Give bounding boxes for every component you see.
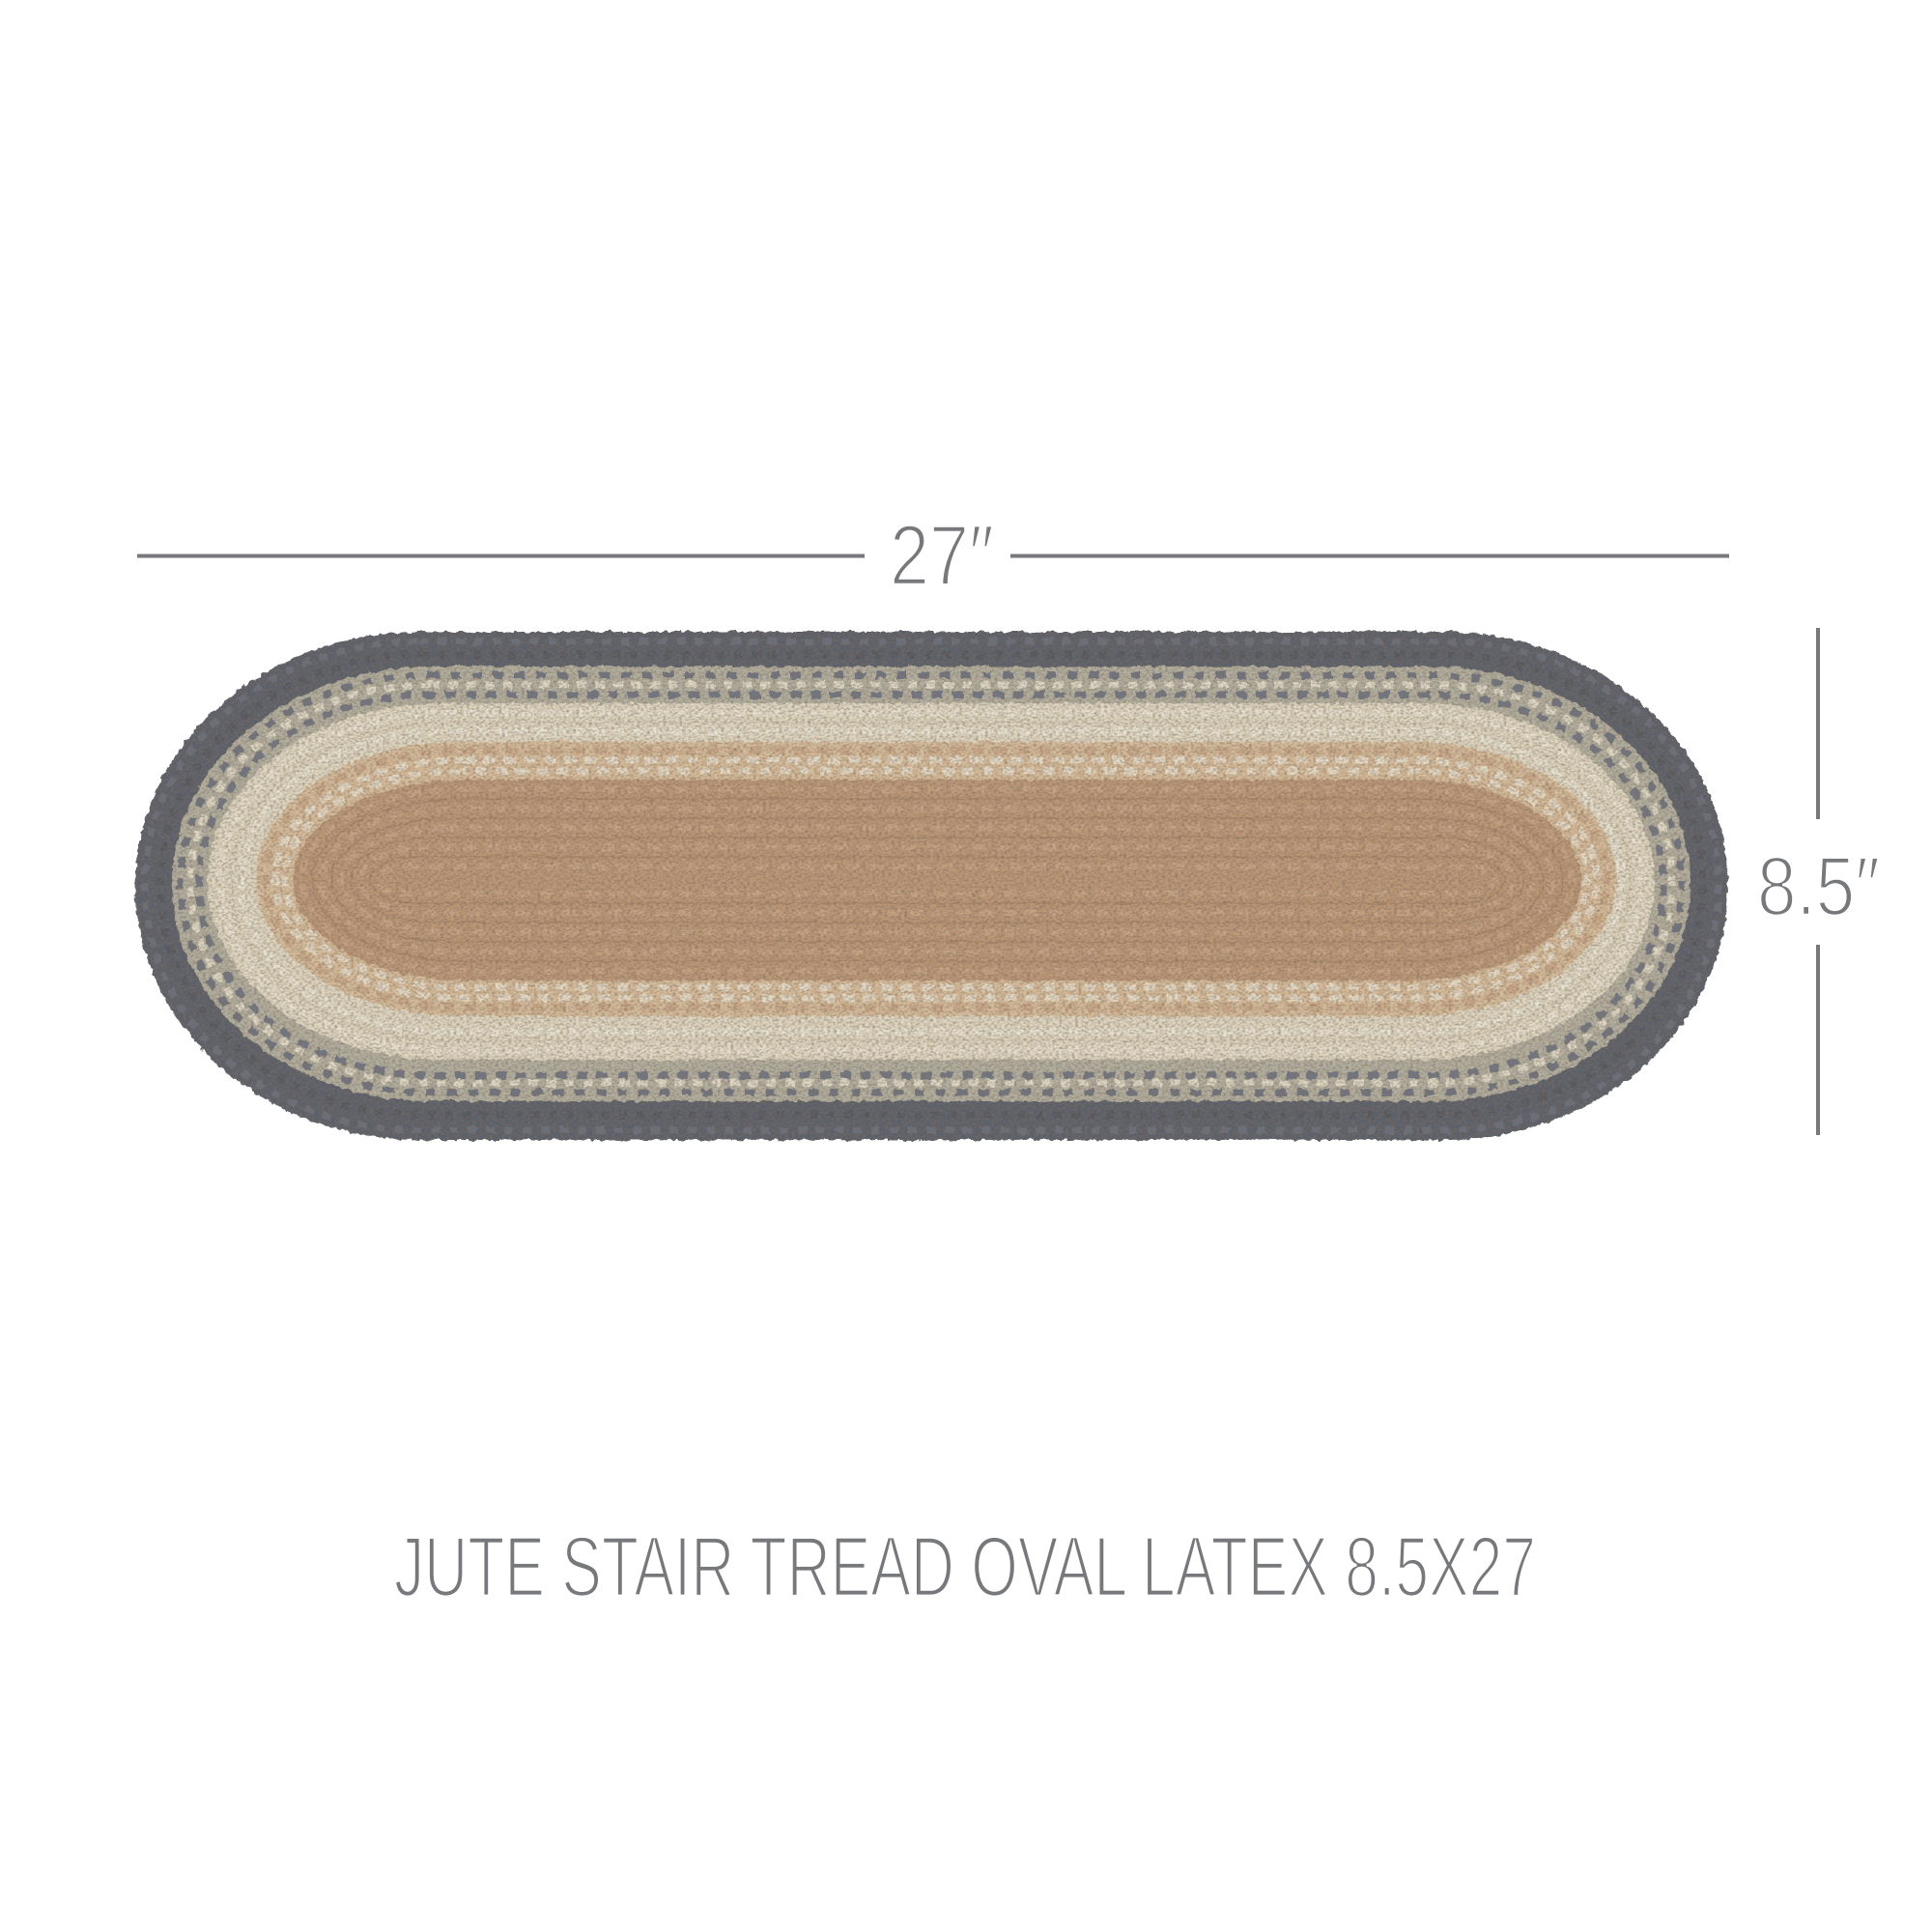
width dimension: 27 inches: 27″ <box>890 507 994 603</box>
height dimension: 8.5 inches: 8.5″ <box>1757 840 1880 933</box>
mixed gray and cream chevron band <box>172 667 1690 1101</box>
tan centre <box>293 780 1581 980</box>
outer gray band <box>135 632 1728 1140</box>
tan and cream chevron band <box>256 742 1616 1016</box>
braided oval jute rug <box>135 632 1728 1140</box>
height dimension: 8.5 inches <box>1757 628 1880 1135</box>
cream band <box>208 703 1655 1060</box>
width dimension: 27 inches <box>137 507 1729 603</box>
